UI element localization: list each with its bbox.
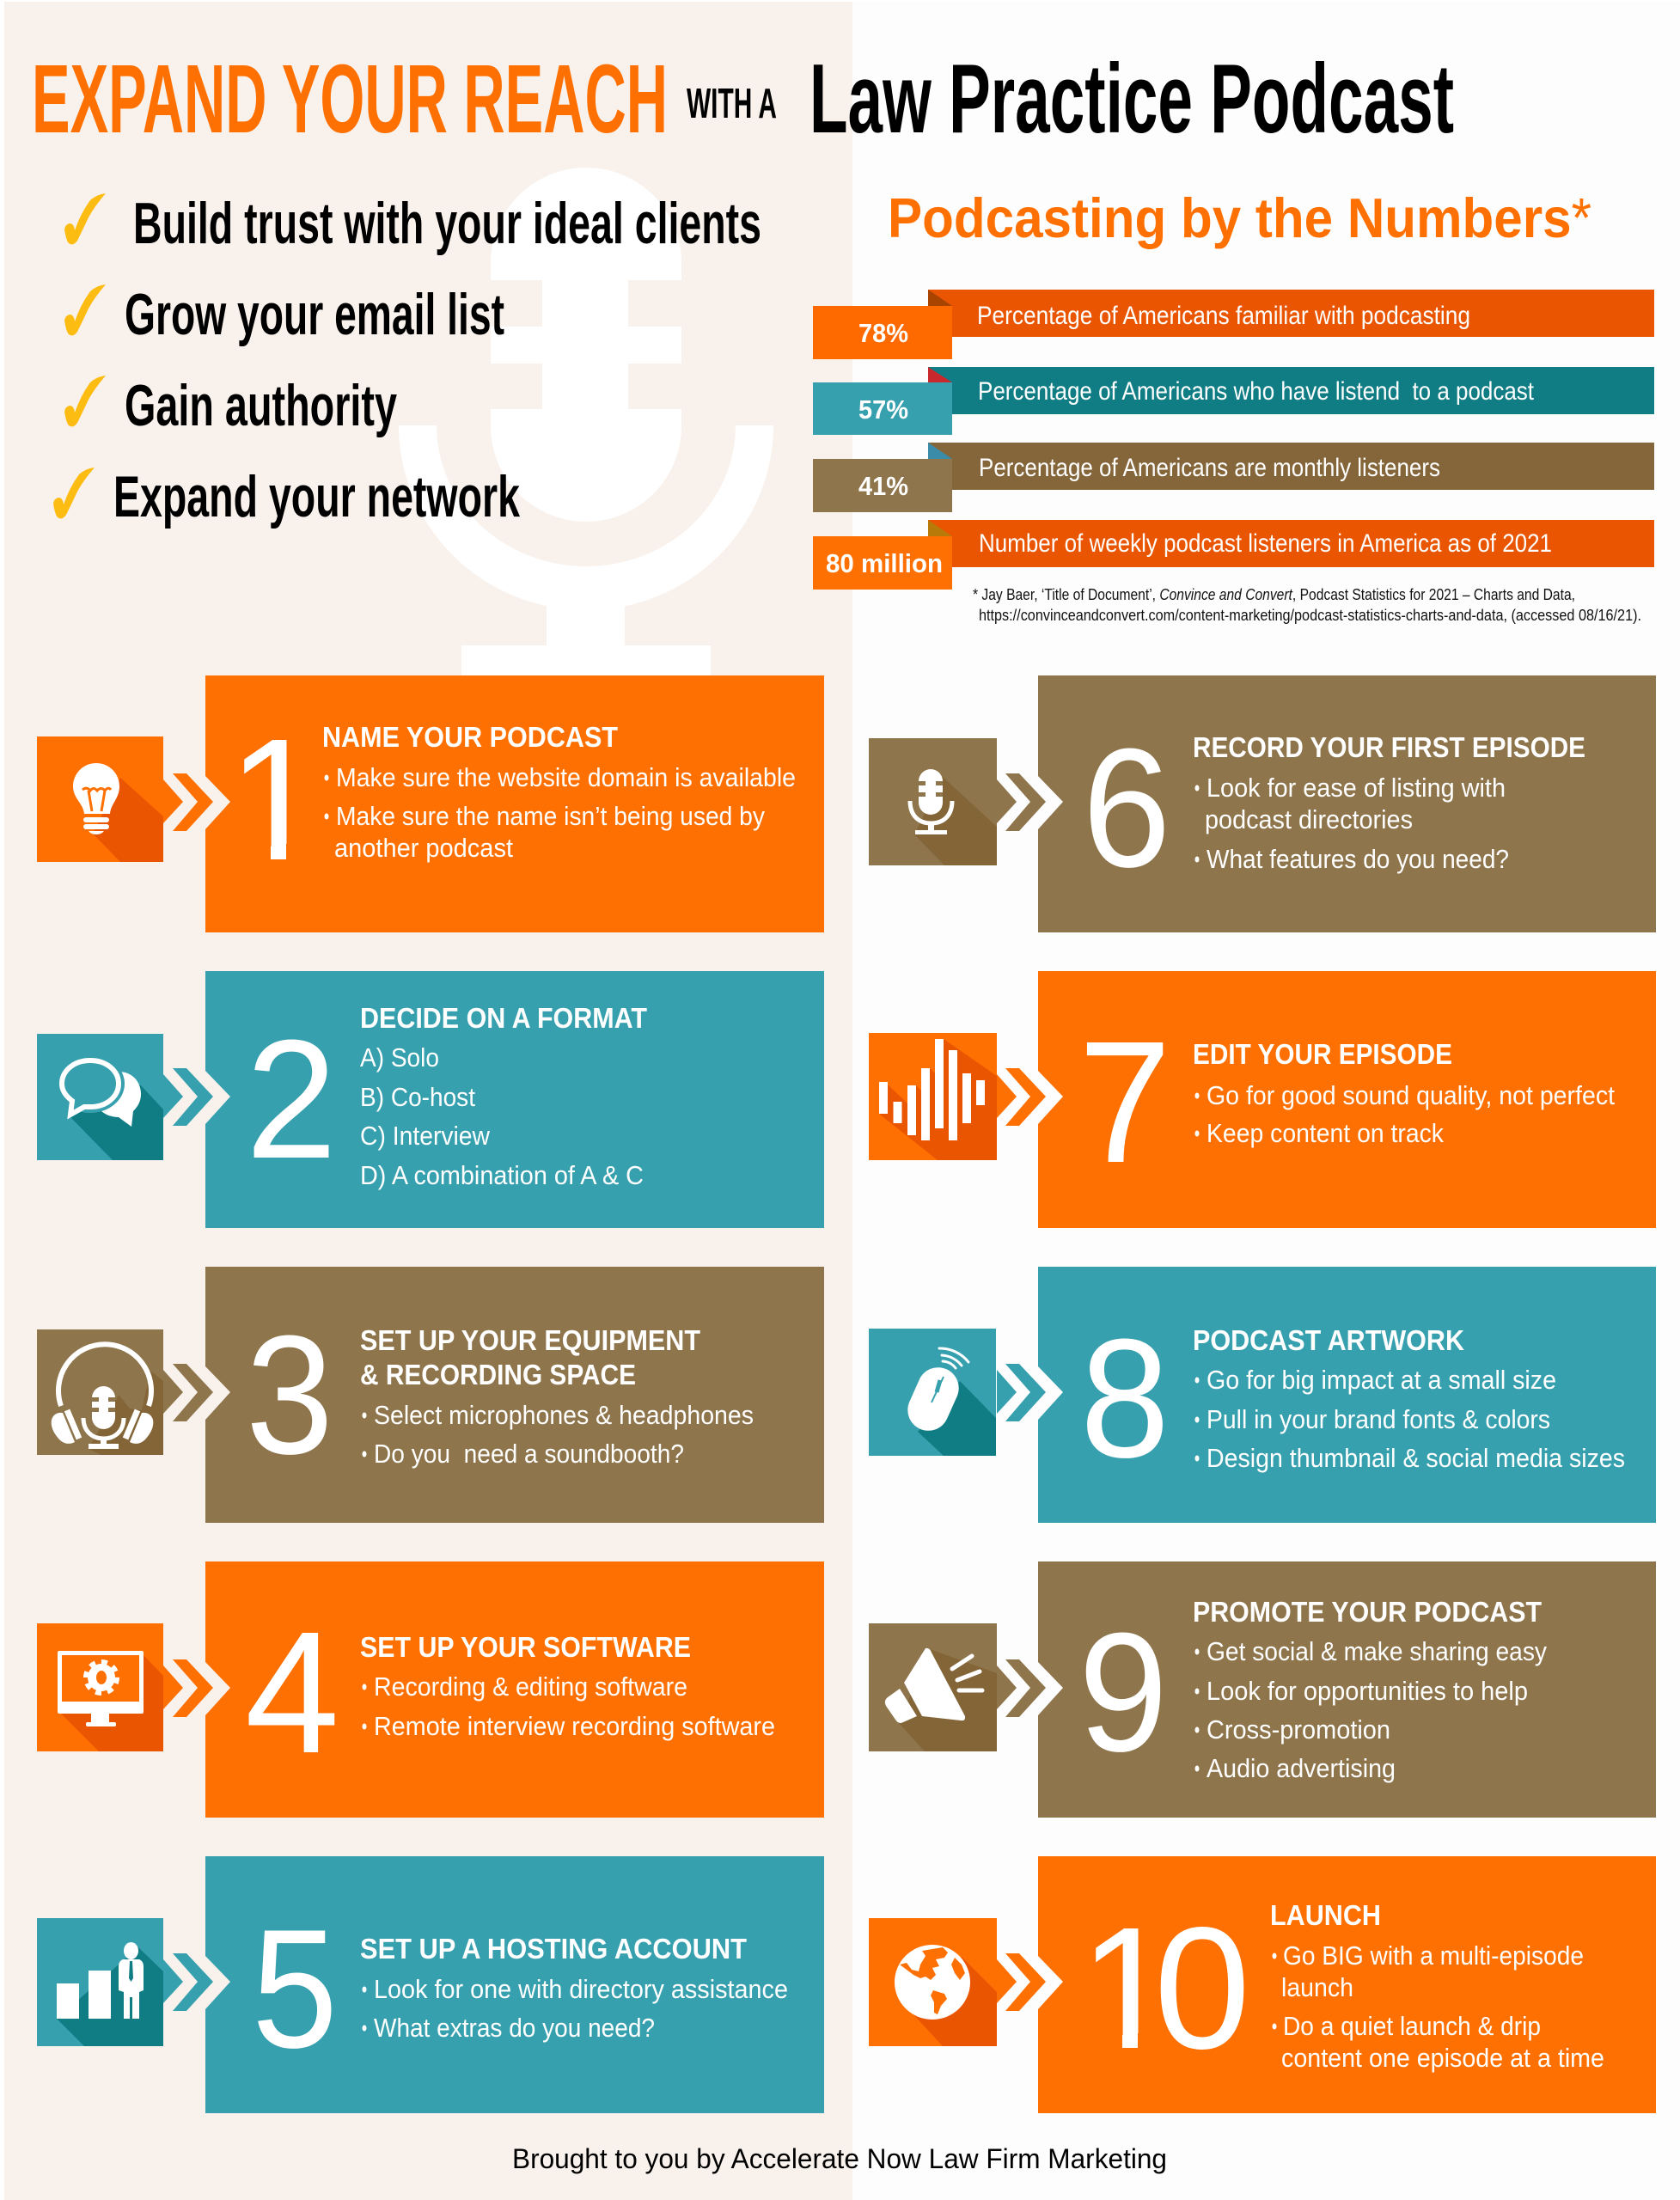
stats ribbon chart — [813, 290, 1654, 590]
step 4 text: Remote interview recording software — [374, 1711, 775, 1741]
benefits checklist: Build trust with your ideal clients — [133, 191, 761, 256]
number 10: 0 — [1154, 1891, 1250, 2085]
step 5 text: What extras do you need? — [374, 2013, 655, 2043]
step 1 panel — [37, 675, 824, 932]
step 10 text — [1270, 1899, 1604, 2073]
step 5 panel — [37, 1856, 824, 2113]
step 9 text: Look for opportunities to help — [1207, 1676, 1528, 1706]
arrow: double chevron — [163, 1068, 230, 1126]
stat: 78%: Percentage of Americans familiar with podcasting — [977, 302, 1470, 330]
step 8 text: Design thumbnail & social media sizes — [1207, 1443, 1625, 1473]
step 9 text — [1193, 1596, 1547, 1783]
arrow: double chevron — [997, 1364, 1063, 1421]
stat: 80 million — [813, 520, 1654, 590]
step 8 panel — [869, 1267, 1656, 1523]
footnote citation — [973, 586, 1641, 624]
step 6 text: podcast directories — [1205, 804, 1413, 834]
number 6: 6 — [1083, 713, 1170, 902]
step 2 text: D) A combination of A & C — [360, 1160, 644, 1190]
step 4 text: SET UP YOUR SOFTWARE — [360, 1631, 691, 1663]
number 10: 1 — [1079, 1891, 1176, 2085]
footer credit: Brought to you by Accelerate Now Law Firm Marketing — [512, 2143, 1167, 2174]
arrow: double chevron — [163, 1364, 230, 1421]
arrow: double chevron — [997, 773, 1063, 831]
step 7 text: Keep content on track — [1207, 1118, 1444, 1148]
benefits checklist: Grow your email list — [125, 282, 504, 347]
icon: light bulb — [37, 736, 163, 862]
step 4 text — [360, 1631, 775, 1741]
step 10 text: Go BIG with a multi-episode — [1283, 1940, 1584, 1971]
step 2 text — [360, 1002, 647, 1190]
step 7 text — [1193, 1038, 1615, 1148]
step 5 text — [360, 1933, 788, 2043]
step 8 text: Pull in your brand fonts & colors — [1207, 1404, 1550, 1434]
stat: 78%: 78% — [858, 318, 908, 348]
arrow: double chevron — [997, 1659, 1063, 1717]
icon: megaphone — [869, 1623, 997, 1751]
step 2 text: B) Co-host — [360, 1082, 475, 1112]
footnote citation: * Jay Baer, ‘Title of Document’, Convince and Convert, Podcast Statistics for 2021 – Charts and Data, — [973, 586, 1575, 603]
stat: 41%: 41% — [858, 471, 908, 501]
icon: bar chart and businessman — [37, 1918, 163, 2046]
arrow: double chevron — [997, 1953, 1063, 2011]
arrow: double chevron — [163, 773, 230, 831]
stat: 80 million: Number of weekly podcast listeners in America as of 2021 — [979, 529, 1552, 558]
number 8: 8 — [1080, 1304, 1170, 1493]
title: EXPAND YOUR REACH — [32, 45, 668, 153]
number 1: 1 — [228, 702, 324, 896]
icon: sound waveform — [869, 1033, 997, 1160]
icon: microphone — [869, 738, 997, 865]
step 7 panel — [869, 971, 1656, 1228]
step 6 panel — [869, 675, 1656, 932]
step 1 text: Make sure the website domain is available — [336, 762, 796, 792]
icon: monitor with gear — [37, 1623, 163, 1751]
step 7 text: EDIT YOUR EPISODE — [1193, 1038, 1452, 1070]
step 3 text: SET UP YOUR EQUIPMENT — [360, 1324, 700, 1356]
step 6 text — [1193, 731, 1585, 874]
benefits checklist: Gain authority — [125, 373, 397, 438]
number 3: 3 — [246, 1300, 333, 1489]
step 6 text: Look for ease of listing with — [1207, 773, 1506, 803]
step 2 text: DECIDE ON A FORMAT — [360, 1002, 647, 1034]
step 6 text: RECORD YOUR FIRST EPISODE — [1193, 731, 1585, 763]
step 2 text: C) Interview — [360, 1121, 491, 1151]
stat: 57%: Percentage of Americans who have listend to a podcast — [978, 377, 1535, 406]
step 8 text: Go for big impact at a small size — [1207, 1365, 1556, 1395]
number 2: 2 — [246, 1005, 337, 1194]
step 1 text: another podcast — [334, 833, 513, 863]
icon: globe — [869, 1918, 997, 2046]
step 9 text: Cross-promotion — [1207, 1714, 1390, 1745]
arrow: double chevron — [163, 1659, 230, 1717]
stat: 78% — [813, 290, 1654, 359]
step 10 panel — [869, 1856, 1656, 2113]
step 10 text: Do a quiet launch & drip — [1283, 2011, 1541, 2041]
benefits checklist — [53, 191, 761, 529]
number 4: 4 — [245, 1595, 339, 1789]
step 9 panel — [869, 1561, 1656, 1818]
step 7 text: Go for good sound quality, not perfect — [1207, 1080, 1615, 1110]
step 1 text — [322, 721, 796, 863]
number 5: 5 — [252, 1894, 338, 2083]
stat: 57%: 57% — [858, 394, 908, 425]
step 5 text: SET UP A HOSTING ACCOUNT — [360, 1933, 747, 1965]
step 10 text: launch — [1281, 1972, 1353, 2002]
stat: 41% — [813, 443, 1654, 512]
icon: wireless mouse — [869, 1329, 996, 1456]
stat: 57% — [813, 367, 1654, 435]
step 9 text: Get social & make sharing easy — [1207, 1636, 1547, 1666]
number 9: 9 — [1078, 1598, 1168, 1787]
step 8 text: PODCAST ARTWORK — [1193, 1324, 1464, 1356]
step 3 panel — [37, 1267, 824, 1523]
step 10 text: content one episode at a time — [1281, 2043, 1604, 2073]
step 1 text: Make sure the name isn’t being used by — [336, 801, 765, 831]
step 1 text: NAME YOUR PODCAST — [322, 721, 618, 753]
step 10 text: LAUNCH — [1270, 1899, 1381, 1931]
step 3 text — [360, 1324, 754, 1469]
step 4 text: Recording & editing software — [374, 1671, 687, 1702]
step 3 text: & RECORDING SPACE — [360, 1359, 636, 1390]
step 4 panel — [37, 1561, 824, 1818]
stat: 80 million: 80 million — [826, 548, 943, 578]
step 2 text: A) Solo — [360, 1042, 439, 1072]
heading: podcasting by the numbers: Podcasting by the Numbers* — [888, 186, 1591, 249]
step 6 text: What features do you need? — [1207, 844, 1509, 874]
arrow: double chevron — [163, 1953, 230, 2011]
step 3 text: Select microphones & headphones — [374, 1400, 754, 1430]
icon: headphones and microphone — [37, 1329, 163, 1455]
step 8 text — [1193, 1324, 1625, 1473]
step 3 text: Do you need a soundbooth? — [374, 1439, 684, 1469]
title: WITH A — [687, 81, 777, 127]
step 9 text: Audio advertising — [1207, 1753, 1396, 1783]
number 7: 7 — [1078, 1005, 1171, 1199]
step 9 text: PROMOTE YOUR PODCAST — [1193, 1596, 1542, 1628]
icon: chat bubbles — [37, 1034, 163, 1160]
watermark microphone icon — [399, 168, 773, 676]
stat: 41%: Percentage of Americans are monthly listeners — [979, 454, 1440, 482]
step 2 panel — [37, 971, 824, 1228]
arrow: double chevron — [997, 1068, 1063, 1126]
benefits checklist: Expand your network — [113, 464, 520, 529]
step 5 text: Look for one with directory assistance — [374, 1974, 788, 2004]
